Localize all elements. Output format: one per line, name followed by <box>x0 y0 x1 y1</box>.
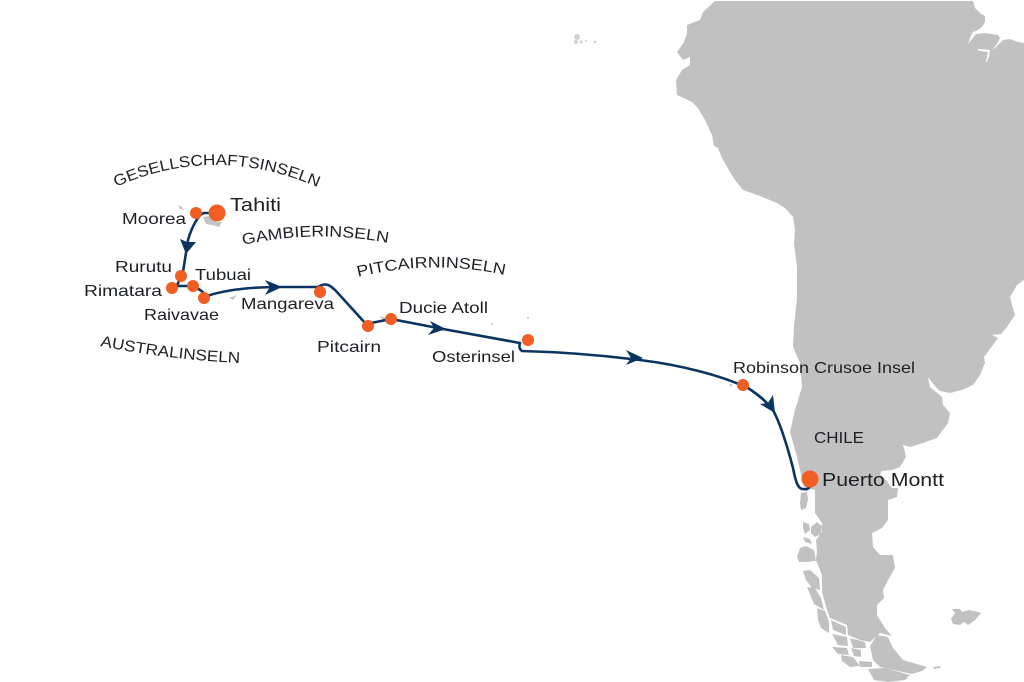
arrow: towards Osterinsel <box>428 321 446 335</box>
stop labels: Osterinsel <box>432 349 515 366</box>
stop labels: Mangareva <box>241 296 334 313</box>
stop markers <box>166 204 818 488</box>
route direction arrows <box>180 239 775 413</box>
region labels: GAMBIERINSELN <box>242 226 388 244</box>
stop labels: Tubuai <box>195 267 251 284</box>
arrow: Moorea to Rurutu <box>180 239 196 254</box>
arrow: towards Robinson Crusoe <box>626 350 643 365</box>
stop labels: Robinson Crusoe Insel <box>733 360 915 377</box>
region labels: AUSTRALINSELN <box>100 336 239 363</box>
stop labels: Rurutu <box>115 259 172 276</box>
stop labels: Tahiti <box>230 195 281 215</box>
map: Chilean fjord islands <box>800 492 808 510</box>
stop labels: Moorea <box>122 211 186 228</box>
region labels: PITCAIRNINSELN <box>357 256 506 276</box>
stop labels: Rimatara <box>84 283 162 300</box>
map: South America landmass <box>676 1 1024 682</box>
route line <box>177 213 811 489</box>
stop labels: Ducie Atoll <box>399 300 488 317</box>
region labels: GESELLSCHAFTSINSELN <box>114 154 320 187</box>
stop labels: Pitcairn <box>317 339 381 356</box>
arrow: towards Mangareva <box>265 280 282 295</box>
map: small Pacific islands <box>178 205 732 386</box>
arrow: towards Puerto Montt <box>760 395 775 413</box>
region labels: CHILE <box>814 430 864 447</box>
region labels <box>100 154 864 447</box>
stop labels: Raivavae <box>144 307 219 324</box>
stop labels <box>84 195 944 490</box>
stop labels: Puerto Montt <box>822 470 944 490</box>
map: Falkland Islands <box>951 609 981 625</box>
map: Tierra del Fuego <box>870 635 927 674</box>
map: Galapagos Islands <box>574 34 596 44</box>
